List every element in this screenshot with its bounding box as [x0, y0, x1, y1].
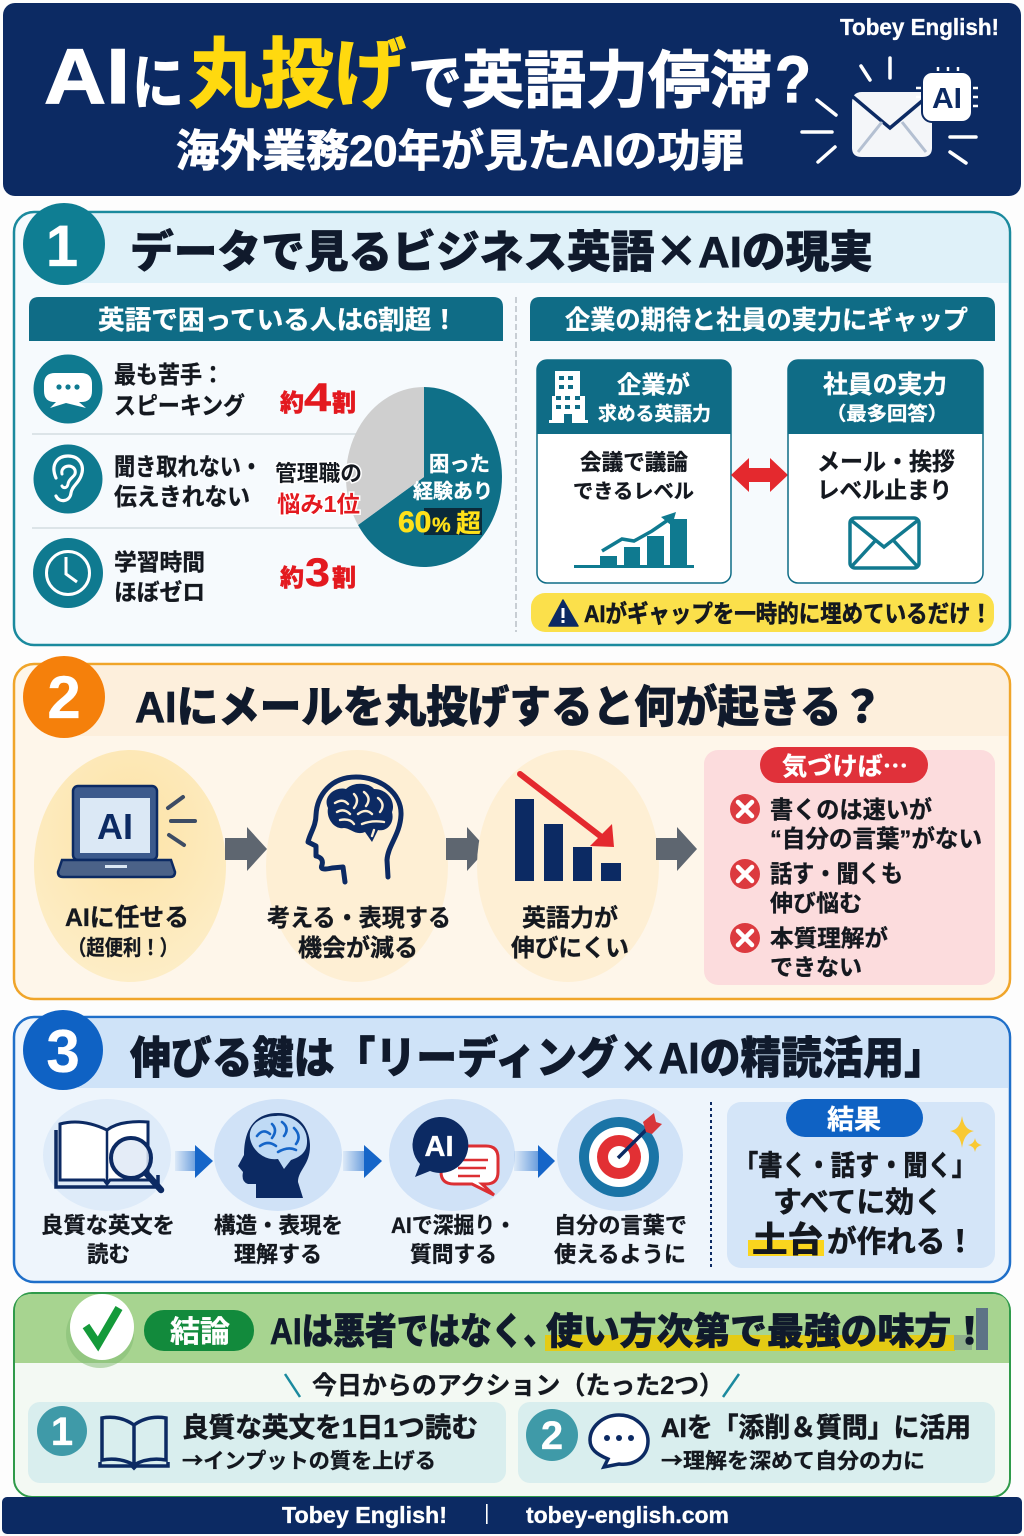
arrow	[514, 1145, 555, 1178]
action card 1: 1	[51, 1410, 73, 1454]
item: できない	[770, 954, 862, 980]
item: 本質理解が	[770, 925, 888, 951]
icon: speech bubble	[34, 354, 102, 424]
panel: section 2 what happens	[14, 656, 1010, 999]
icon: laptop	[58, 786, 195, 877]
step: read	[41, 1099, 175, 1267]
manager callout: 管理職の	[275, 461, 362, 486]
icon: open book	[100, 1417, 168, 1468]
card: company expectation: 企業が	[617, 371, 690, 399]
item: study time	[114, 549, 205, 605]
icon: head with brain	[308, 777, 401, 882]
item: study time: ほぼゼロ	[114, 579, 205, 605]
icon: book and magnifier	[56, 1122, 161, 1190]
footer: tobey-english.com	[526, 1502, 729, 1528]
step: ask AI	[389, 1099, 516, 1267]
section 2 number	[23, 656, 105, 738]
section 1 number: 1	[46, 214, 78, 279]
item: speaking: スピーキング	[114, 392, 245, 420]
icon: check mark	[66, 1294, 134, 1368]
footer: Tobey English!	[282, 1502, 447, 1528]
item: speaking: 最も苦手：	[114, 362, 224, 389]
item: “自分の言葉”がない	[770, 825, 982, 853]
action card 2: 2	[541, 1414, 563, 1458]
panel: section 3 reading	[14, 1010, 1010, 1282]
pie chart	[346, 387, 502, 567]
arrow	[225, 827, 267, 871]
arrow	[175, 1145, 213, 1178]
right block: gap	[530, 297, 995, 632]
card: staff skill: メール・挨拶	[817, 449, 955, 476]
step: understand: 理解する	[234, 1242, 322, 1267]
step: leave it to AI: AIに任せる	[65, 904, 189, 932]
right sub heading: 企業の期待と社員の実力にギャップ	[565, 305, 968, 335]
card: company expectation: できるレベル	[573, 480, 694, 503]
section 3 number: 3	[46, 1018, 80, 1085]
conclusion message	[270, 1308, 988, 1352]
callout: warning	[531, 593, 994, 632]
section 2 number: 2	[47, 664, 81, 731]
stat: about 30 percent	[280, 551, 356, 595]
panel: section 1 data	[14, 203, 1010, 645]
pie chart: 超	[456, 510, 481, 538]
stat: about 40 percent: 4	[304, 376, 332, 420]
subtitle: 海外業務20年が見たAIの功罪	[176, 127, 744, 176]
pie chart: 60	[398, 506, 431, 539]
action card 1	[28, 1402, 506, 1483]
step: understand: 構造・表現を	[214, 1213, 343, 1238]
highlighted line	[748, 1221, 975, 1260]
title: に	[132, 50, 184, 117]
step: leave it to AI	[34, 750, 226, 982]
title	[44, 32, 811, 120]
section 2 heading: AIにメールを丸投げすると何が起きる？	[135, 682, 883, 732]
action card 2: AIを「添削＆質問」に活用	[661, 1413, 971, 1443]
item	[770, 861, 903, 916]
step: fewer chances to think	[266, 750, 451, 982]
badge	[786, 1099, 923, 1137]
icon: building	[549, 371, 588, 423]
icon: cross	[730, 859, 760, 889]
stat: about 30 percent: 3	[305, 551, 330, 595]
icon: sparkles	[950, 1116, 982, 1152]
step: skills stall	[477, 750, 659, 982]
stat: about 40 percent	[280, 376, 356, 420]
brand name: Tobey English!	[840, 14, 999, 40]
icon: clock	[33, 538, 103, 608]
panel: conclusion	[14, 1293, 1010, 1497]
action card 1: →インプットの質を上げる	[182, 1445, 436, 1475]
footer	[2, 1497, 1022, 1534]
step: understand	[214, 1099, 343, 1267]
section 3 heading: 伸びる鍵は「リーディング×AIの精読活用」	[130, 1022, 945, 1086]
icon: envelope with AI chip: AI	[932, 83, 962, 115]
pie chart: 困った	[429, 453, 490, 476]
item	[770, 925, 888, 980]
section 3 number	[23, 1010, 103, 1090]
highlighted line: 土台	[752, 1221, 823, 1260]
action card 1: 良質な英文を1日1つ読む	[182, 1413, 478, 1443]
icon: AI chat bubbles: AI	[424, 1131, 454, 1163]
step: own words: 自分の言葉で	[554, 1213, 687, 1238]
badge: conclusion: 結論	[170, 1316, 230, 1349]
title: で	[408, 50, 462, 117]
panel: before you know it	[704, 747, 995, 985]
card: staff skill: レベル止まり	[817, 477, 952, 503]
icon: head and brain	[238, 1113, 310, 1198]
step: leave it to AI: （超便利！）	[68, 937, 178, 960]
step: read: 読む	[87, 1242, 130, 1267]
step: ask AI: 質問する	[410, 1242, 497, 1267]
step: own words	[554, 1099, 687, 1267]
icon: AI chat bubbles	[413, 1117, 498, 1195]
left sub heading: 英語で困っている人は6割超！	[98, 305, 458, 335]
header banner	[3, 3, 1021, 196]
icon: declining bars	[515, 774, 621, 881]
icon: ear	[34, 444, 102, 514]
badge: conclusion	[144, 1310, 254, 1351]
double arrow	[731, 458, 788, 492]
step: skills stall: 伸びにくい	[511, 935, 629, 962]
conclusion message: 使い方次第で最強の味方！	[546, 1311, 988, 1352]
card: staff skill: （最多回答）	[826, 402, 948, 425]
badge: 結果	[827, 1105, 881, 1135]
card: company expectation	[537, 360, 731, 583]
action card 2	[518, 1402, 995, 1483]
step: read: 良質な英文を	[41, 1213, 175, 1238]
icon: rising bar chart	[574, 512, 694, 568]
right sub heading	[530, 297, 995, 341]
stat: about 30 percent: 割	[332, 565, 356, 592]
icon: cross	[730, 923, 760, 953]
item	[770, 796, 982, 853]
icon: envelope outline	[850, 518, 919, 568]
manager callout: 悩み1位	[277, 491, 360, 517]
title: 英語力停滞	[462, 47, 772, 116]
icon: speech bubble outline	[590, 1415, 648, 1467]
panel: result: 「書く・話す・聞く」	[734, 1150, 976, 1181]
pie chart: 経験あり	[413, 480, 493, 503]
item: 書くのは速いが	[770, 796, 932, 824]
title: 丸投げ	[189, 33, 406, 118]
badge: 気づけば…	[782, 747, 908, 783]
action card 2: →理解を深めて自分の力に	[661, 1445, 925, 1475]
item: speaking	[114, 362, 245, 420]
step: fewer chances to think: 考える・表現する	[267, 905, 451, 932]
step: skills stall: 英語力が	[522, 904, 618, 932]
arrow	[343, 1145, 382, 1178]
item: 伸び悩む	[770, 890, 862, 916]
item: listening	[114, 454, 262, 511]
panel: result	[727, 1099, 995, 1268]
section 1 number	[23, 203, 105, 285]
left sub heading	[29, 297, 503, 341]
step: fewer chances to think: 機会が減る	[298, 934, 418, 962]
item: listening: 聞き取れない・	[114, 454, 262, 481]
stat: about 40 percent: 約	[280, 390, 304, 417]
section 1 heading: データで見るビジネス英語×AIの現実	[130, 216, 873, 280]
icon: laptop: AI	[97, 806, 133, 847]
highlighted line: が作れる！	[827, 1225, 975, 1259]
step: ask AI: AIで深掘り・	[391, 1213, 516, 1238]
icon: envelope with AI chip	[802, 58, 978, 163]
item: study time: 学習時間	[114, 549, 205, 575]
stat: about 40 percent: 割	[332, 390, 356, 417]
card: staff skill	[788, 360, 983, 583]
item: listening: 伝えきれない	[114, 484, 250, 511]
title: ?	[775, 42, 811, 116]
card: company expectation: 会議で議論	[580, 450, 688, 475]
card: company expectation: 求める英語力	[598, 402, 711, 425]
arrow	[446, 827, 487, 871]
pie chart: %	[432, 514, 451, 537]
conclusion message: AIは悪者ではなく、	[270, 1311, 555, 1352]
icon: target	[579, 1113, 662, 1197]
action heading: 今日からのアクション（たった2つ）	[312, 1372, 724, 1400]
panel: result: すべてに効く	[773, 1186, 943, 1219]
step: own words: 使えるように	[554, 1242, 686, 1267]
card: staff skill: 社員の実力	[823, 371, 947, 399]
stat: about 30 percent: 約	[280, 565, 304, 592]
item: 話す・聞くも	[770, 861, 903, 888]
manager callout	[275, 461, 362, 517]
title: AI	[44, 32, 130, 120]
left block: 6割	[29, 297, 503, 608]
icon: cross	[730, 794, 760, 824]
arrow	[656, 827, 697, 871]
